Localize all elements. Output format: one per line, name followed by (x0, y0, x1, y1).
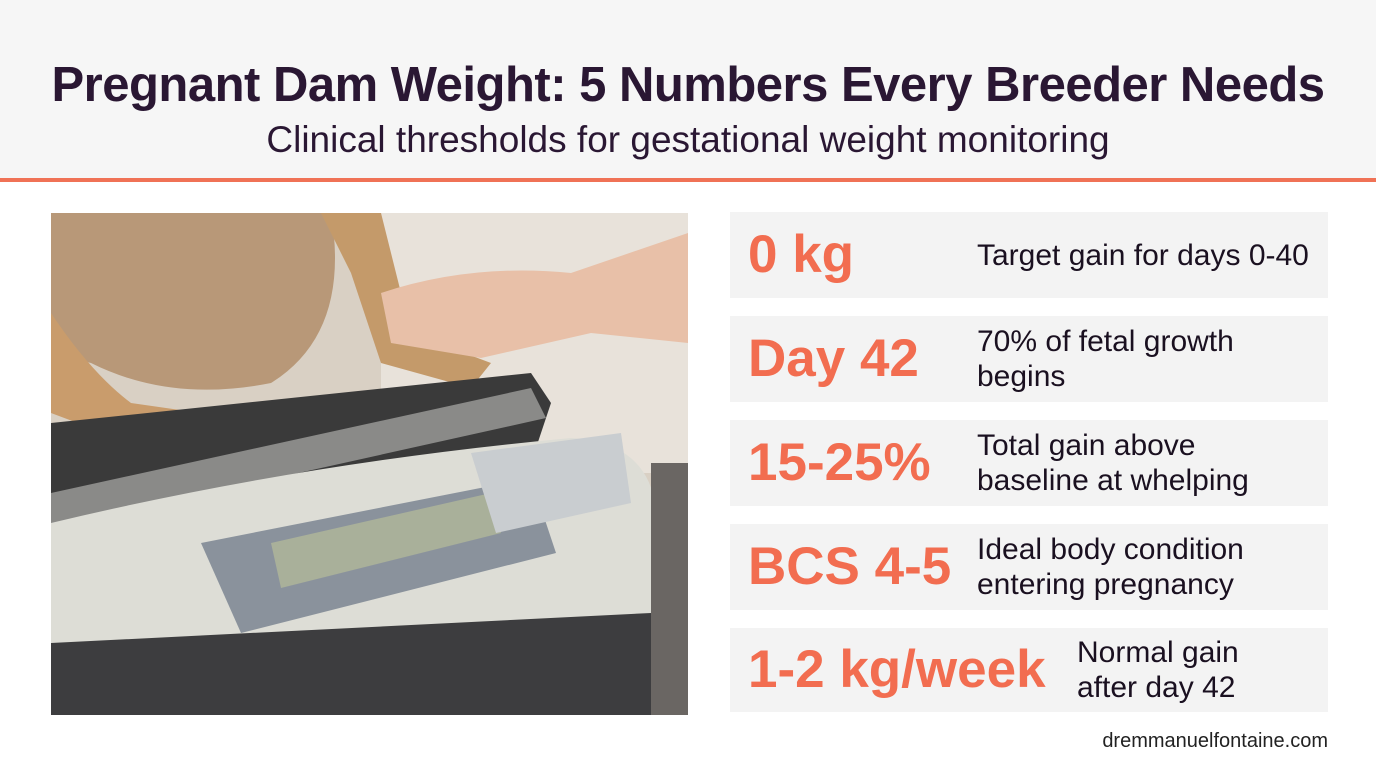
stat row 2: Day 42 (748, 329, 919, 388)
stat row 2: 70% of fetal growth (977, 325, 1234, 358)
stat row 5 (730, 628, 1328, 712)
stat row 3: baseline at whelping (977, 464, 1249, 497)
stat row 5: Normal gain (1077, 636, 1239, 669)
stat row 1 (730, 212, 1328, 298)
stat row 5: 1-2 kg/week (748, 640, 1046, 699)
header band (0, 0, 1376, 182)
subtitle: Clinical thresholds for gestational weight monitoring (266, 119, 1110, 160)
photo: dog paws on scale (51, 213, 688, 715)
stat row 4: Ideal body condition (977, 533, 1244, 566)
stat row 3 (730, 420, 1328, 506)
stat row 4 (730, 524, 1328, 610)
stat row 3: Total gain above (977, 429, 1196, 462)
stat row 2 (730, 316, 1328, 402)
stat row 1: Target gain for days 0-40 (977, 239, 1309, 272)
stat row 4: BCS 4-5 (748, 537, 951, 596)
stat row 4: entering pregnancy (977, 568, 1234, 601)
stat row 3: 15-25% (748, 433, 931, 492)
stat row 5: after day 42 (1077, 671, 1235, 704)
stat row 1: 0 kg (748, 225, 854, 284)
stat row 2: begins (977, 360, 1065, 393)
title: Pregnant Dam Weight: 5 Numbers Every Breeder Needs (51, 58, 1325, 112)
footer credit: dremmanuelfontaine.com (1102, 730, 1328, 752)
